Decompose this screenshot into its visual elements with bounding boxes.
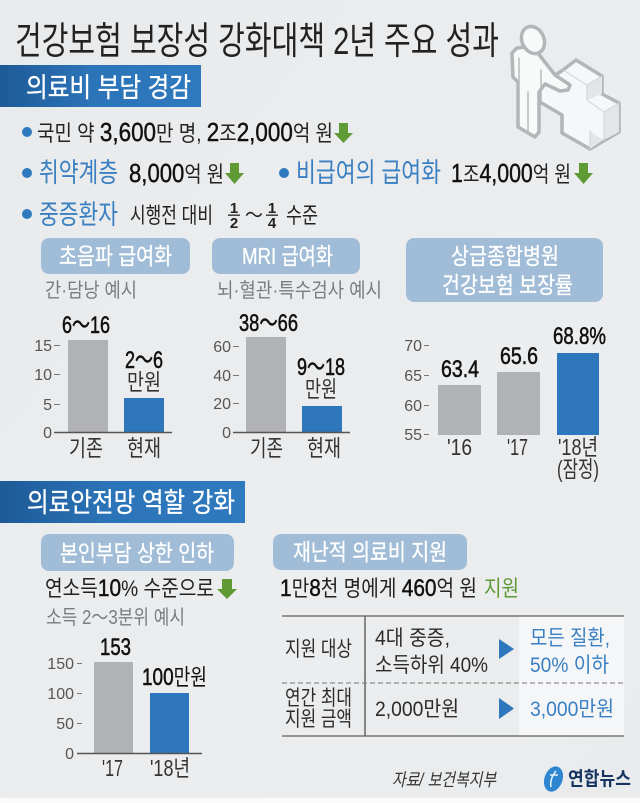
bar chart: 본인부담: 150 (47, 656, 74, 673)
bar chart: MRI: 40 (213, 368, 231, 385)
bar chart: 초음파: 5 (43, 397, 52, 414)
table: 지원 대상 및 금액: 2,000만원 (375, 698, 459, 721)
table: 지원 대상 및 금액: 3,000만원 (530, 698, 614, 721)
panel: 상급종합병원 건강보험 보장률: 건강보험 보장률 (442, 272, 573, 298)
table: 지원 대상 및 금액 (282, 616, 624, 736)
bar chart: 본인부담: '18년 (150, 755, 190, 781)
source: 자료/ 보건복지부 (392, 770, 497, 790)
icon: down arrow (217, 579, 237, 599)
bar chart: 본인부담: '17 (102, 755, 123, 781)
bar chart: 보장률: '17 (507, 434, 528, 460)
bullet: 중증환자: 1 (268, 200, 276, 217)
bar chart: 본인부담: 100만원 (142, 664, 207, 691)
panel: 초음파 급여화: 초음파 급여화 (59, 243, 172, 269)
table: 지원 대상 및 금액: 50% 이하 (530, 654, 609, 677)
bar chart: 초음파: 10 (34, 367, 52, 384)
panel: 재난적 의료비 지원 (273, 534, 624, 736)
section header: 의료안전망 역할 강화 (0, 481, 245, 523)
section header: 의료비 부담 경감 (0, 65, 201, 107)
table: 지원 대상 및 금액: 연간 최대 (285, 687, 352, 710)
table: 지원 대상 및 금액: 소득하위 40% (375, 654, 488, 677)
panel: 본인부담 상한 인하: 본인부담 상한 인하 (60, 540, 214, 566)
bar chart: 보장률: 55 (404, 427, 422, 444)
bullet: 비급여의 급여화 (279, 158, 593, 188)
panel: 본인부담 상한 인하: 소득 2～3분위 예시 (46, 606, 185, 629)
bar chart: 보장률: '16 (447, 434, 472, 460)
icon: down arrow (334, 123, 353, 143)
panel: 상급종합병원 건강보험 보장률: 상급종합병원 (451, 243, 559, 269)
bar chart: 보장률: 60 (404, 398, 422, 415)
bullet: 중증환자: 4 (268, 215, 277, 232)
bar chart: 초음파: 6～16 (62, 312, 110, 339)
table: 지원 대상 및 금액: 4대 중증, (375, 627, 450, 650)
table: 지원 대상 및 금액: 지원 대상 (285, 638, 352, 661)
bullet: 중증환자: ～ (245, 205, 263, 227)
bar chart: MRI (213, 310, 350, 461)
bar chart: 초음파 (34, 312, 172, 461)
bullet: 국민: 국민 약 3,600만 명, 2조2,000억 원 (37, 117, 333, 147)
bullet: 취약계층 (22, 158, 244, 188)
bar chart: 초음파: 기존 (69, 435, 103, 461)
bar chart: 보장률: 70 (404, 338, 422, 355)
bar chart: 본인부담: 100 (47, 686, 74, 703)
bar chart: 초음파: 15 (34, 338, 52, 355)
bar chart: 초음파: 0 (43, 425, 52, 442)
bar chart: 보장률: 63.4 (441, 356, 479, 383)
bullet: 중증환자: 중증환자 (39, 200, 118, 230)
bar chart: MRI: 만원 (305, 376, 337, 402)
panel: 초음파 급여화: 간·담낭 예시 (45, 279, 137, 302)
bullet: 중증환자: 시행전 대비 (130, 203, 213, 228)
bullet: 취약계층: 8,000억 원 (129, 158, 224, 188)
bar chart: 보장률: 65 (404, 368, 422, 385)
bar chart: MRI: 기존 (250, 435, 283, 461)
bullet: 중증환자 (22, 200, 318, 232)
bar chart: MRI: 38～66 (239, 310, 298, 337)
logo: 연합뉴스: 연합뉴스 (568, 768, 631, 790)
panel: MRI 급여화: MRI 급여화 (242, 243, 333, 269)
panel: 본인부담 상한 인하 (41, 534, 237, 781)
bar chart: MRI: 60 (213, 339, 231, 356)
bullet: 중증환자: 2 (230, 215, 238, 232)
panel: 초음파 급여화 (34, 238, 190, 461)
table: 지원 대상 및 금액: 모든 질환, (530, 627, 610, 650)
table: 지원 대상 및 금액: 지원 금액 (285, 708, 352, 731)
panel: 재난적 의료비 지원: 지원 (484, 576, 519, 601)
bar chart: MRI: 20 (213, 396, 231, 413)
bullet: 비급여의 급여화: 비급여의 급여화 (296, 158, 441, 188)
panel: 상급종합병원 건강보험 보장률 (404, 238, 606, 482)
bar chart: 초음파: 현재 (127, 435, 161, 461)
panel: MRI 급여화 (212, 238, 382, 461)
bar chart: MRI: 0 (222, 425, 231, 442)
panel: 본인부담 상한 인하: 연소득10% 수준으로 (45, 575, 214, 602)
title: 건강보험 보장성 강화대책 2년 주요 성과 (15, 21, 499, 63)
panel: 재난적 의료비 지원: 재난적 의료비 지원 (293, 539, 447, 565)
panel: MRI 급여화: 뇌·혈관·특수검사 예시 (217, 279, 382, 302)
section header: 의료안전망 역할 강화: 의료안전망 역할 강화 (27, 488, 235, 518)
panel: 재난적 의료비 지원: 1만8천 명에게 460억 원 (280, 575, 477, 602)
bullet: 취약계층: 취약계층 (39, 158, 118, 188)
bar chart: 초음파: 만원 (127, 369, 161, 395)
bar chart: 보장률: (잠정) (557, 456, 599, 482)
bar chart: MRI: 현재 (307, 435, 341, 461)
section header: 의료비 부담 경감: 의료비 부담 경감 (26, 73, 191, 103)
bar chart: 보장률 (404, 323, 606, 482)
bullet: 중증환자: 수준 (286, 203, 318, 228)
bar chart: 보장률: 68.8% (553, 323, 606, 350)
bar chart: MRI: 9～18 (297, 354, 345, 381)
bullet: 중증환자: 1 (230, 200, 238, 217)
bar chart: 본인부담: 50 (56, 716, 74, 733)
logo: 연합뉴스 (541, 764, 631, 794)
bar chart: 본인부담: 0 (65, 746, 74, 763)
bar chart: 보장률: '18년 (558, 434, 598, 460)
bar chart: 보장률: 65.6 (500, 343, 538, 370)
bar chart: 초음파: 2～6 (125, 347, 163, 374)
bar chart: 본인부담: 153 (100, 634, 131, 661)
bullet: 비급여의 급여화: 1조4,000억 원 (451, 158, 571, 188)
icon: person with medical cross (512, 23, 619, 149)
bar chart: 본인부담 (47, 634, 207, 781)
